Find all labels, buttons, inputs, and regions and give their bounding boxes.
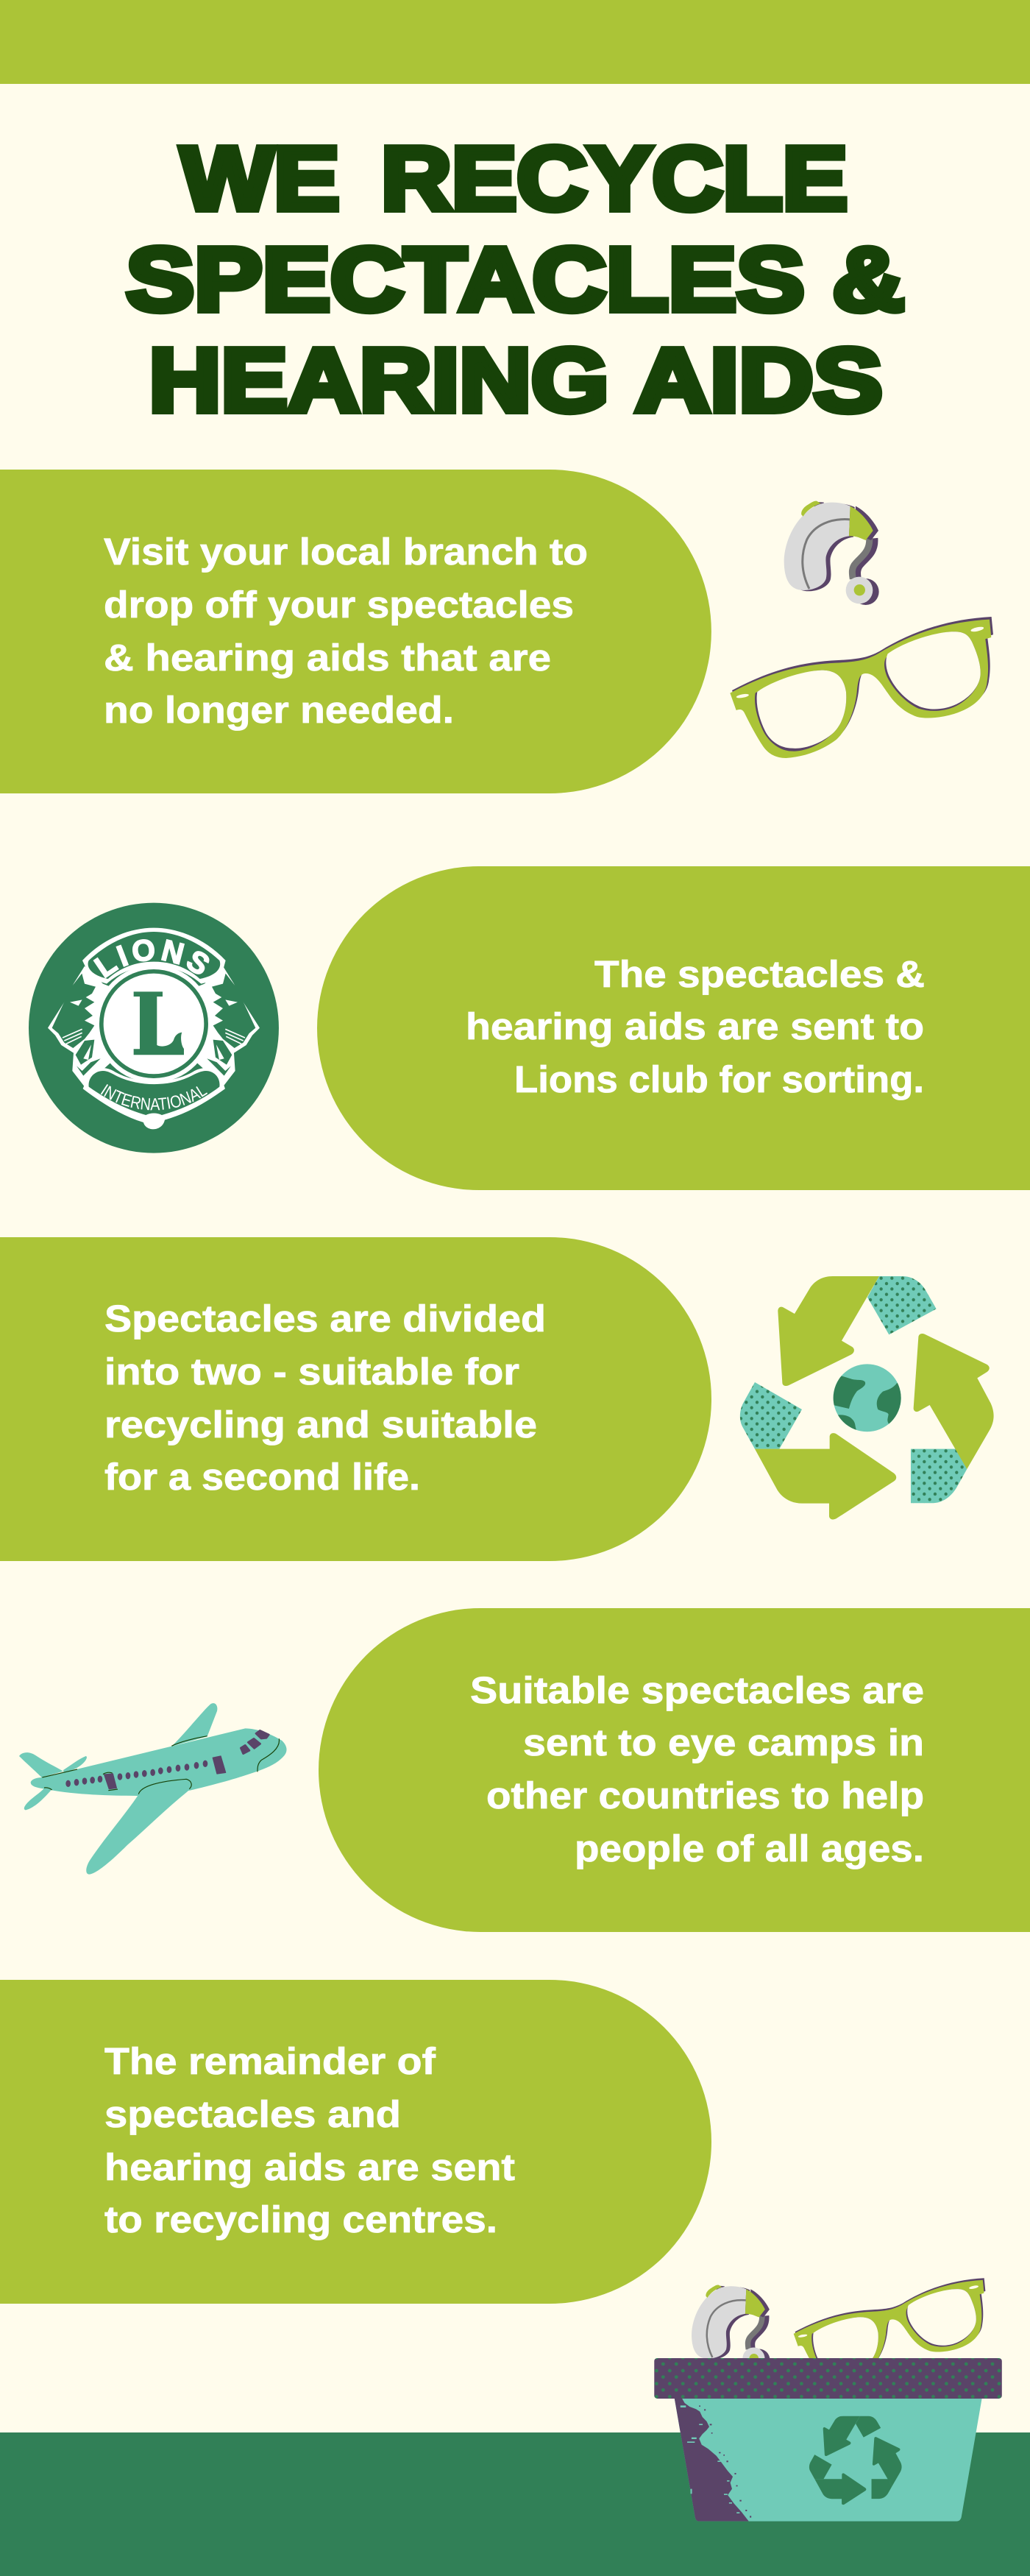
bin body and lid (654, 2358, 1002, 2522)
panel: step 3 dividing: recycling and suitable (104, 1404, 537, 1446)
panel: step 5 recycling centres: spectacles and (104, 2093, 401, 2135)
icon: aeroplane (19, 1703, 287, 1875)
emblem bottom banner (83, 1068, 225, 1129)
icon: recycling arrows with globe (740, 1276, 994, 1520)
icon: recycling bin with spectacles and hearing aid (654, 2278, 1002, 2522)
title (127, 128, 905, 430)
panel: step 1 drop off: & hearing aids that are (104, 637, 551, 679)
icon: hearing aid (784, 501, 879, 605)
panel: step 1 drop off (0, 470, 711, 793)
panel: step 5 recycling centres: hearing aids are sent (104, 2146, 515, 2188)
panel: step 2 sorting: The spectacles & (594, 953, 925, 995)
panel: step 5 recycling centres: to recycling centres. (104, 2198, 497, 2240)
title: HEARING (149, 330, 609, 430)
spectacles in bin (794, 2278, 985, 2381)
emblem registered mark (149, 1114, 158, 1123)
title: AIDS (636, 330, 883, 430)
emblem LIONS lettering: LIONS (93, 939, 209, 979)
panel: step 1 drop off: drop off your spectacles (104, 584, 574, 626)
icon: Lions International emblem (29, 902, 279, 1153)
emblem centre L roundel (95, 965, 213, 1083)
panel: step 5 recycling centres: The remainder of (104, 2040, 436, 2082)
panel: step 3 dividing: for a second life. (104, 1456, 420, 1498)
panel: step 1 drop off: Visit your local branch to (104, 531, 588, 573)
emblem right lion (180, 966, 260, 1087)
title: RECYCLE (381, 128, 848, 228)
panel: step 3 dividing: into two - suitable for (104, 1351, 519, 1393)
panel: step 2 sorting: hearing aids are sent to (466, 1005, 924, 1047)
title: SPECTACLES (127, 230, 805, 330)
hearing aid in bin (692, 2285, 770, 2371)
panel: step 4 eye camps (319, 1608, 1030, 1932)
top band (0, 0, 1030, 84)
panel: step 2 sorting (317, 866, 1030, 1190)
panel: step 1 drop off: no longer needed. (104, 689, 454, 731)
panel: step 4 eye camps: people of all ages. (575, 1827, 924, 1869)
panel: step 2 sorting: Lions club for sorting. (514, 1058, 924, 1100)
title: & (833, 230, 905, 330)
panel: step 4 eye camps: sent to eye camps in (523, 1722, 924, 1763)
panel: step 4 eye camps: other countries to help (486, 1774, 924, 1816)
panel: step 3 dividing: Spectacles are divided (104, 1298, 546, 1340)
emblem registered mark: R (152, 1116, 156, 1122)
emblem left lion (48, 966, 127, 1087)
emblem INTERNATIONAL lettering: INTERNATIONAL (100, 1084, 207, 1110)
panel: step 3 dividing (0, 1237, 711, 1561)
bin distressed speckle (699, 2405, 751, 2518)
title: WE (181, 128, 340, 228)
bottom band (0, 2432, 1030, 2576)
recycle symbol on bin (809, 2416, 902, 2505)
panel: step 5 recycling centres (0, 1980, 711, 2304)
globe (831, 1364, 903, 1432)
emblem top banner (82, 928, 226, 984)
icon: spectacles (730, 617, 993, 758)
panel: step 4 eye camps: Suitable spectacles are (470, 1669, 924, 1711)
